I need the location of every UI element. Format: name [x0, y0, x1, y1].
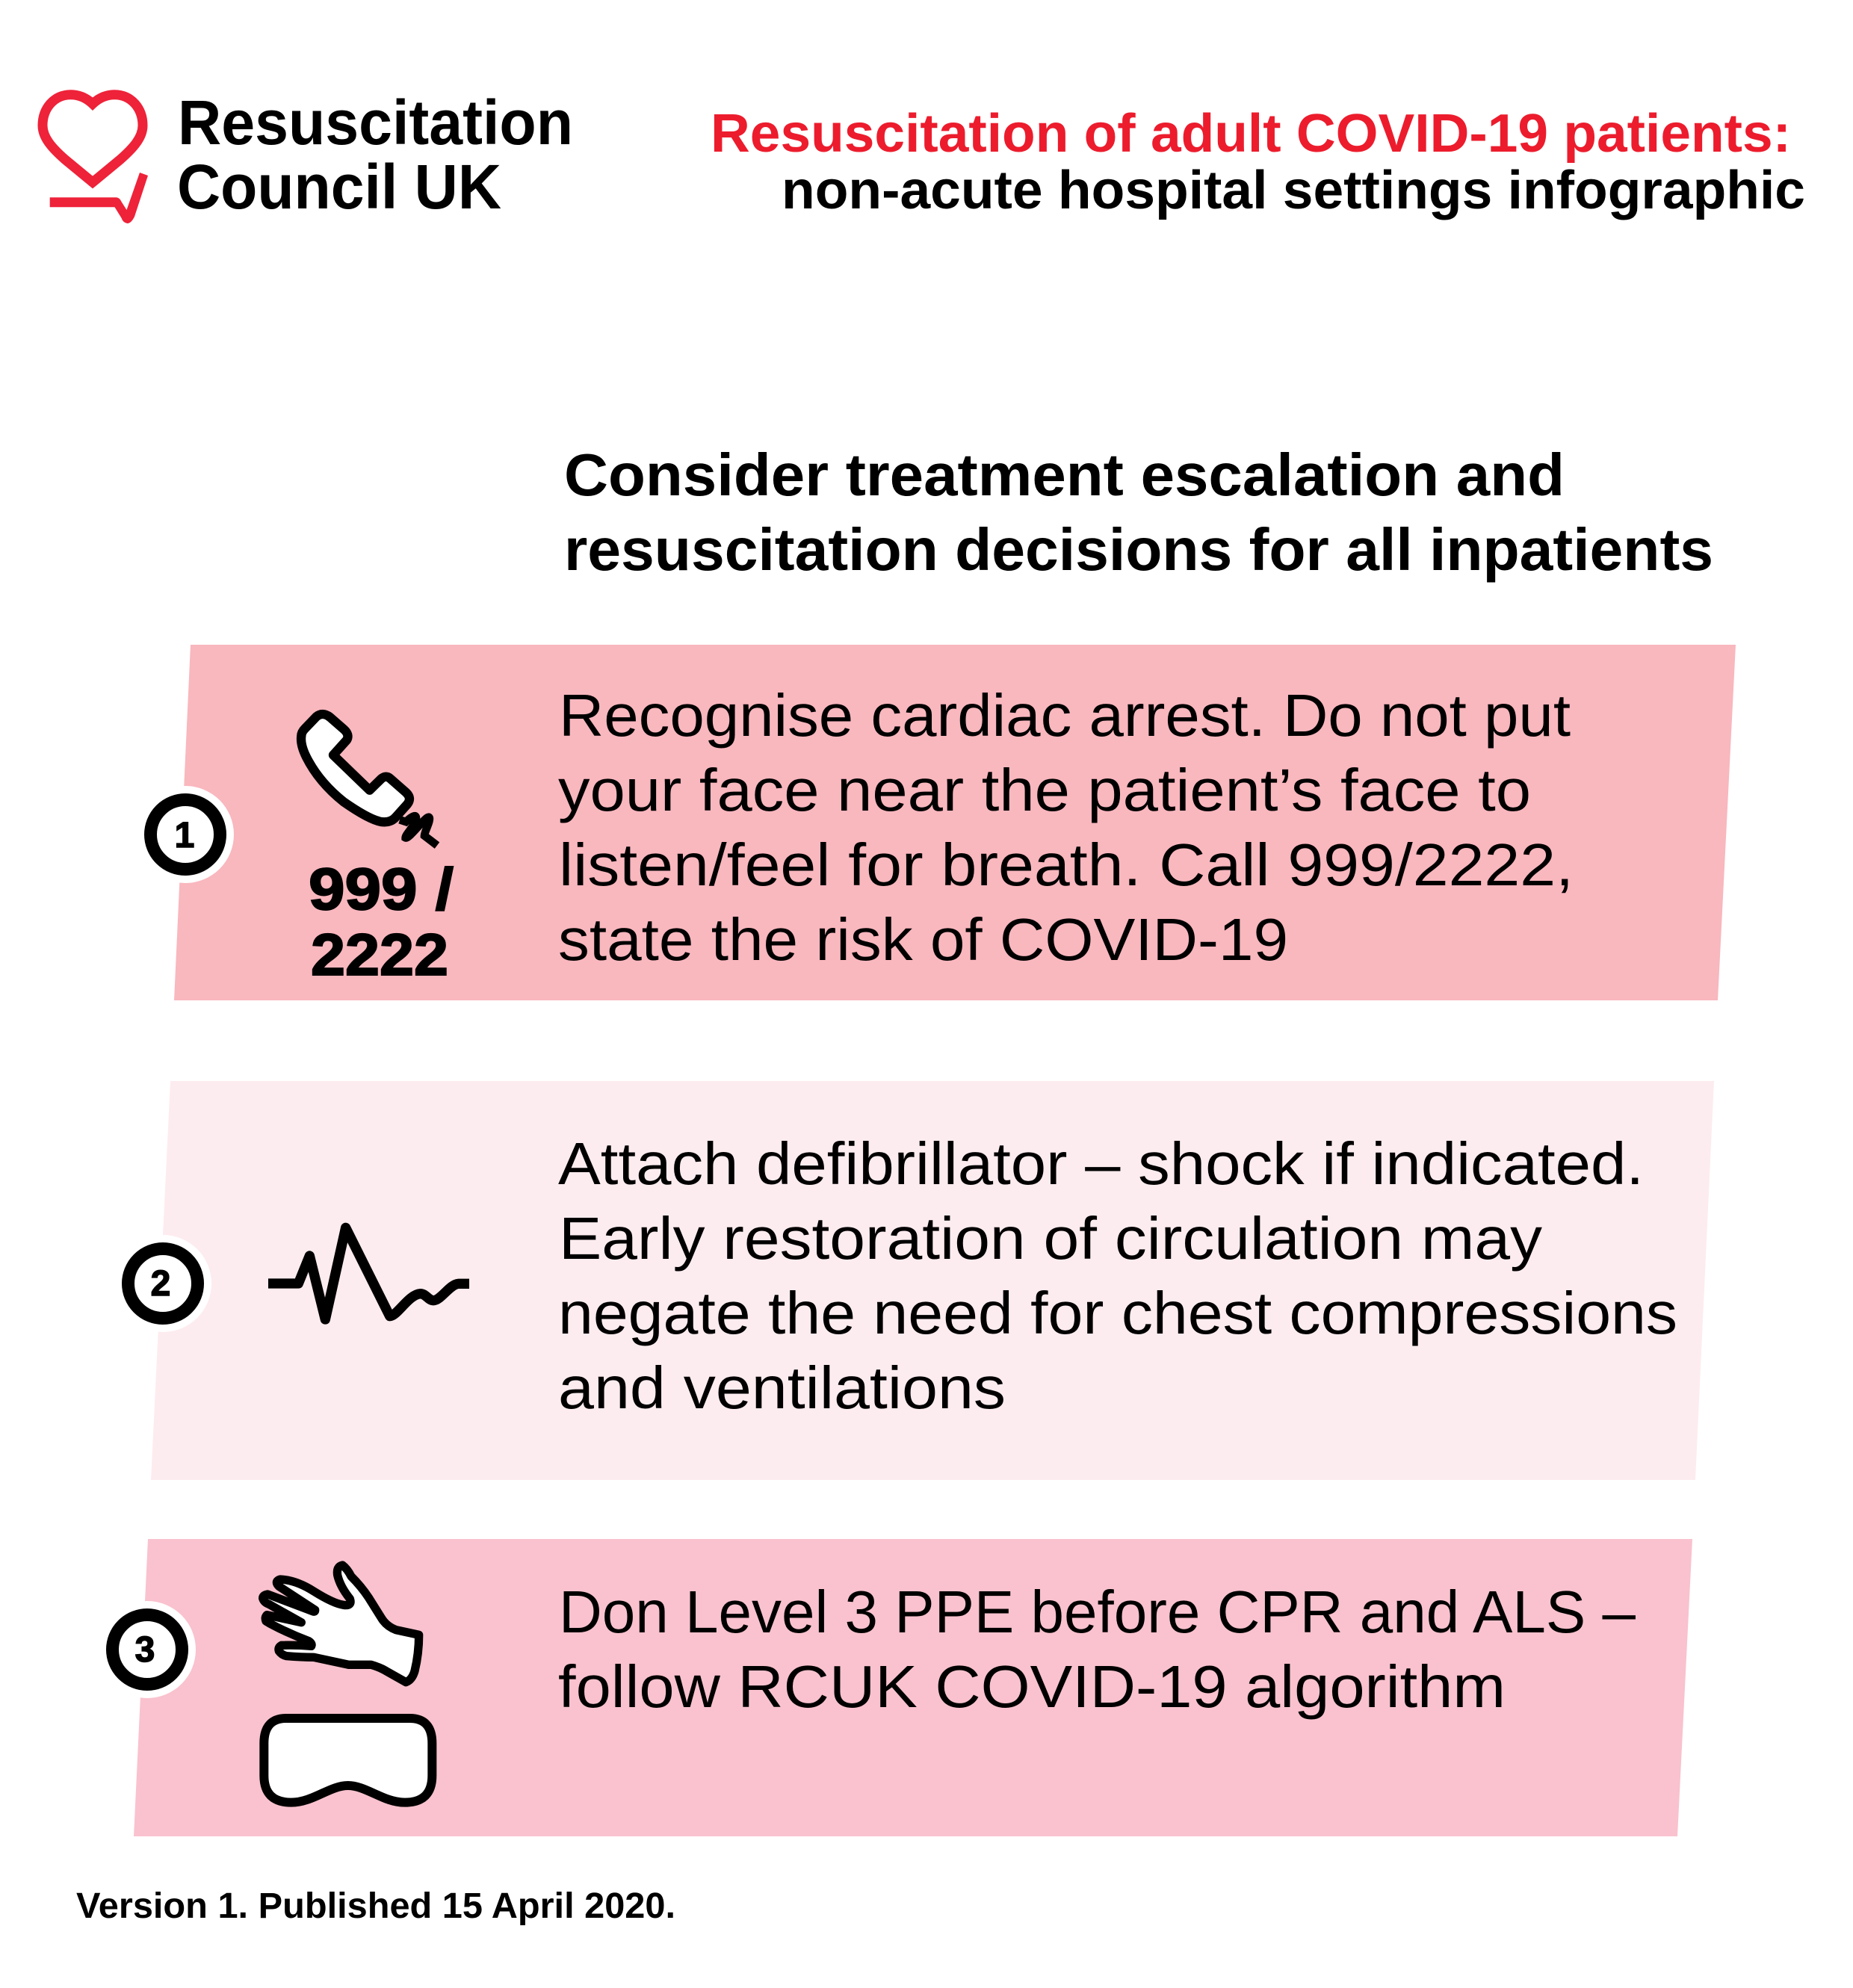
footer: version note: Version 1. Published 15 April 2020.: [76, 1886, 675, 1926]
logo wordmark: [177, 87, 573, 222]
step 2 text: [558, 1130, 1677, 1421]
step number 3: 3: [135, 1630, 155, 1670]
step 2 text: Attach defibrillator – shock if indicated.: [558, 1130, 1644, 1197]
step 3 text: [558, 1579, 1636, 1720]
step number 3: [99, 1601, 196, 1698]
panel: step 3: [99, 1539, 1692, 1836]
step 1 text: Recognise cardiac arrest. Do not put: [559, 682, 1571, 749]
step 2 text: and ventilations: [558, 1354, 1006, 1421]
step 1 text: [558, 682, 1574, 973]
phone numbers: 2222: [311, 921, 448, 988]
logo wordmark: Council UK: [177, 152, 501, 222]
phone numbers: [309, 855, 454, 988]
step 3 text: follow RCUK COVID-19 algorithm: [558, 1653, 1506, 1720]
icon: pulse tick: [50, 173, 148, 223]
step 1 text: your face near the patient’s face to: [558, 757, 1531, 823]
step number 2: 2: [151, 1264, 170, 1304]
icon: ECG waveform: [268, 1227, 469, 1319]
heading: Consider treatment escalation and: [564, 442, 1565, 508]
step 3 text: Don Level 3 PPE before CPR and ALS –: [559, 1579, 1636, 1645]
logo wordmark: Resuscitation: [178, 87, 573, 158]
panel background: [174, 645, 1736, 1000]
title: Resuscitation of adult COVID-19 patients:: [711, 104, 1791, 164]
title: [711, 104, 1805, 220]
step 1 text: state the risk of COVID-19: [558, 906, 1288, 973]
step number 1: [137, 786, 234, 883]
icon: telephone handset: [301, 714, 437, 846]
step number 2: [114, 1235, 211, 1332]
icon: goggles: [264, 1718, 432, 1803]
panel background: [151, 1081, 1714, 1480]
panel: step 2: [114, 1081, 1714, 1480]
title: non-acute hospital settings infographic: [782, 161, 1805, 220]
icon: heart outline: [43, 95, 143, 182]
step 2 text: negate the need for chest compressions: [558, 1280, 1677, 1346]
logo: Resuscitation Council UK: [43, 87, 573, 223]
step 1 text: listen/feel for breath. Call 999/2222,: [559, 832, 1574, 898]
heading: resuscitation decisions for all inpatients: [564, 516, 1713, 583]
heading: [564, 442, 1713, 583]
icon: glove: [263, 1565, 419, 1682]
panel: step 1: [137, 645, 1736, 1000]
step 2 text: Early restoration of circulation may: [559, 1205, 1542, 1272]
phone numbers: 999 /: [309, 855, 454, 922]
panel background: [134, 1539, 1692, 1836]
step number 1: 1: [175, 816, 194, 855]
